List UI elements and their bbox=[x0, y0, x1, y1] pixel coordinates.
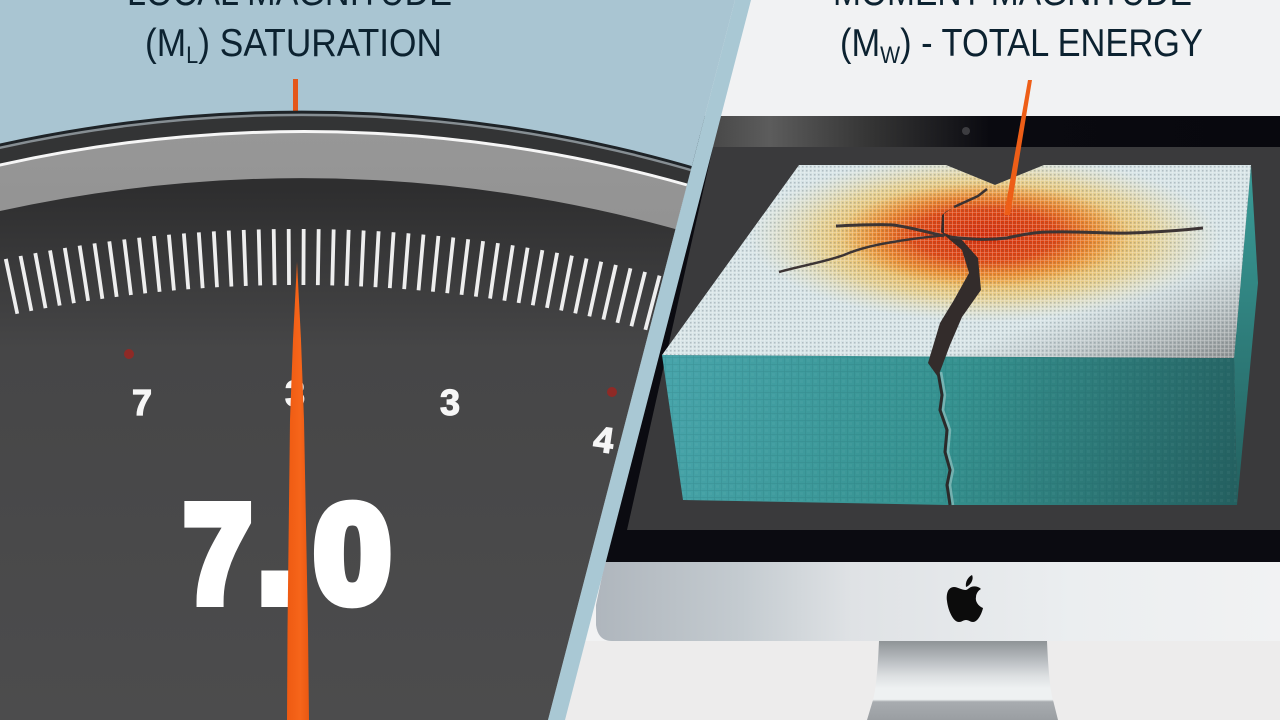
chart: 3D fault block bbox=[660, 80, 1260, 505]
block front face bbox=[662, 355, 1237, 505]
central fault crack bbox=[928, 207, 981, 377]
gauge rim bbox=[0, 111, 735, 720]
dial numbers: 3 bbox=[440, 382, 460, 423]
block right side face bbox=[1234, 165, 1258, 505]
title: local magnitude: L bbox=[186, 41, 198, 68]
block front grid bbox=[662, 355, 1237, 505]
icon: apple logo bbox=[947, 575, 983, 622]
title: moment magnitude: W bbox=[880, 42, 901, 68]
front crack bbox=[938, 372, 950, 505]
large reading bbox=[184, 500, 391, 608]
front crack highlight bbox=[941, 372, 953, 505]
dial numbers: 7 bbox=[132, 382, 152, 423]
monitor top bezel bbox=[700, 116, 1280, 147]
large reading: 0 bbox=[314, 478, 391, 632]
title: local magnitude: (M bbox=[145, 20, 186, 64]
title: moment magnitude bbox=[833, 0, 1203, 68]
crack hook bbox=[954, 189, 987, 207]
dial numbers: 3 bbox=[285, 373, 305, 414]
dial numbers bbox=[132, 380, 614, 454]
monitor camera bbox=[962, 127, 970, 135]
large reading: . bbox=[260, 475, 298, 629]
red marker left bbox=[124, 349, 134, 359]
crack branch upper left bbox=[836, 225, 944, 236]
gauge needle bbox=[287, 262, 309, 720]
monitor black frame bbox=[600, 116, 1280, 562]
gauge dial face bbox=[0, 178, 735, 720]
panel: computer monitor bbox=[590, 116, 1280, 720]
panel: right background bbox=[560, 0, 1280, 720]
monitor screen bbox=[627, 147, 1280, 530]
monitor silver chin bbox=[590, 562, 1280, 641]
pointer line top bbox=[293, 79, 298, 113]
monitor stand bbox=[867, 641, 1058, 720]
crack branch right bbox=[950, 228, 1203, 239]
diagonal divider bbox=[548, 0, 751, 720]
panel: left gauge side bbox=[0, 0, 740, 720]
block top face bbox=[662, 165, 1251, 358]
red marker right bbox=[607, 387, 617, 397]
large reading: 7 bbox=[184, 476, 252, 631]
title: local magnitude bbox=[127, 0, 452, 68]
left background bbox=[0, 0, 735, 171]
title: local magnitude: ) SATURATION bbox=[198, 20, 442, 64]
title: moment magnitude: (M bbox=[840, 21, 880, 64]
title: moment magnitude: ) - TOTAL ENERGY bbox=[900, 21, 1203, 64]
crack branch lower left bbox=[779, 235, 946, 272]
gauge tick marks bbox=[5, 257, 655, 303]
dial numbers: 4 bbox=[591, 418, 617, 461]
heat map bbox=[660, 154, 1260, 360]
orange pointer line bbox=[1004, 80, 1032, 215]
